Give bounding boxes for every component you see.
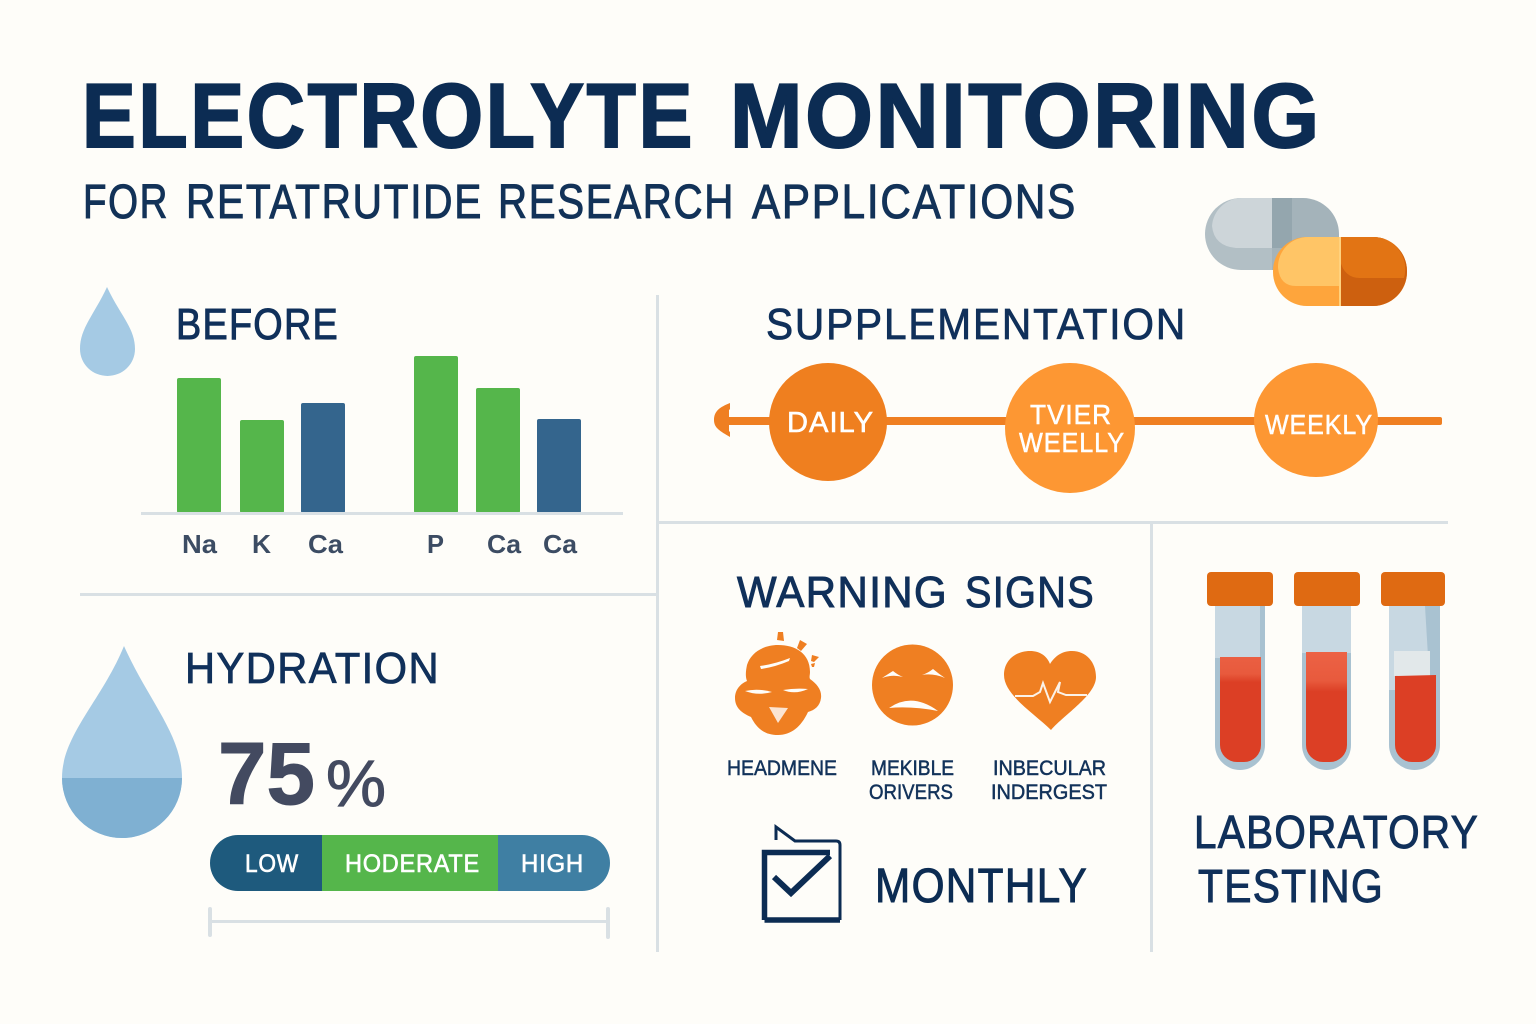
step: weekly: WEEKLY [1265, 409, 1373, 440]
subtitle: RESEARCH [498, 176, 735, 229]
heading: hydration: HYDRATION [185, 644, 440, 693]
symptom labels: INBECULAR [993, 757, 1106, 780]
heading: warning signs: WARNING [737, 568, 948, 617]
hydration scale: HODERATE [345, 850, 480, 878]
symptom labels: ORIVERS [869, 781, 953, 804]
bar chart: Ca [543, 529, 578, 559]
title: MONITORING [730, 66, 1322, 167]
step: weekly [1254, 363, 1378, 477]
subtitle: RETATRUTIDE [186, 176, 483, 229]
hydration scale: LOW [245, 850, 299, 878]
stat: 75 percent [218, 724, 386, 823]
bar chart: P [427, 529, 444, 559]
range bracket [208, 907, 610, 939]
bar chart: K [252, 529, 271, 559]
stat: 75 percent: % [326, 746, 386, 820]
heading: warning signs [737, 568, 1095, 617]
icon: capsules [1205, 198, 1407, 306]
icon: heart with pulse [1004, 651, 1096, 730]
step: twice weekly [1005, 363, 1135, 493]
title: ELECTROLYTE [82, 66, 695, 167]
icon: sad face [872, 644, 953, 726]
icon: headache face [735, 632, 821, 735]
hydration scale [210, 835, 610, 891]
icon: timeline arrowhead [714, 403, 736, 437]
icon: large water drop [62, 646, 182, 838]
panel: laboratory testing [1194, 572, 1479, 912]
bar chart: Na [182, 529, 218, 559]
title [82, 66, 1322, 167]
icon: monthly calendar check [764, 827, 840, 920]
heading: warning signs: SIGNS [965, 568, 1095, 617]
bar chart [141, 356, 623, 559]
step: twice weekly: TVIER [1030, 399, 1112, 430]
bar chart: Ca [308, 529, 344, 559]
step: daily [769, 363, 887, 481]
hydration scale: HIGH [521, 850, 584, 878]
heading: before: BEFORE [176, 300, 339, 349]
heading: laboratory testing: LABORATORY [1194, 806, 1479, 858]
heading: laboratory testing [1194, 806, 1479, 912]
symptom labels: MEKIBLE [871, 757, 954, 780]
symptom labels: INDERGEST [991, 781, 1107, 804]
bar chart: Ca [487, 529, 522, 559]
step: twice weekly: WEELLY [1019, 427, 1125, 458]
panel: supplementation [714, 300, 1442, 493]
subtitle: FOR [83, 176, 169, 229]
icon: test tube 1 [1207, 572, 1273, 770]
symptom labels: HEADMENE [727, 757, 837, 780]
step: daily: DAILY [787, 407, 874, 439]
panel: before [80, 287, 623, 559]
subtitle [83, 176, 1077, 229]
symptom labels [727, 757, 1107, 804]
icon: small water drop [80, 287, 135, 376]
stat: 75 percent: 75 [218, 724, 315, 823]
panel: warning signs [727, 568, 1107, 920]
subtitle: APPLICATIONS [752, 176, 1077, 229]
panel: hydration [62, 644, 610, 939]
label: monthly: MONTHLY [875, 860, 1088, 913]
panel dividers [80, 295, 1448, 952]
icon: test tube 3 [1381, 572, 1445, 770]
heading: supplementation: SUPPLEMENTATION [766, 300, 1187, 349]
icon: test tube 2 [1294, 572, 1360, 770]
timeline [714, 363, 1442, 493]
heading: laboratory testing: TESTING [1198, 860, 1384, 912]
